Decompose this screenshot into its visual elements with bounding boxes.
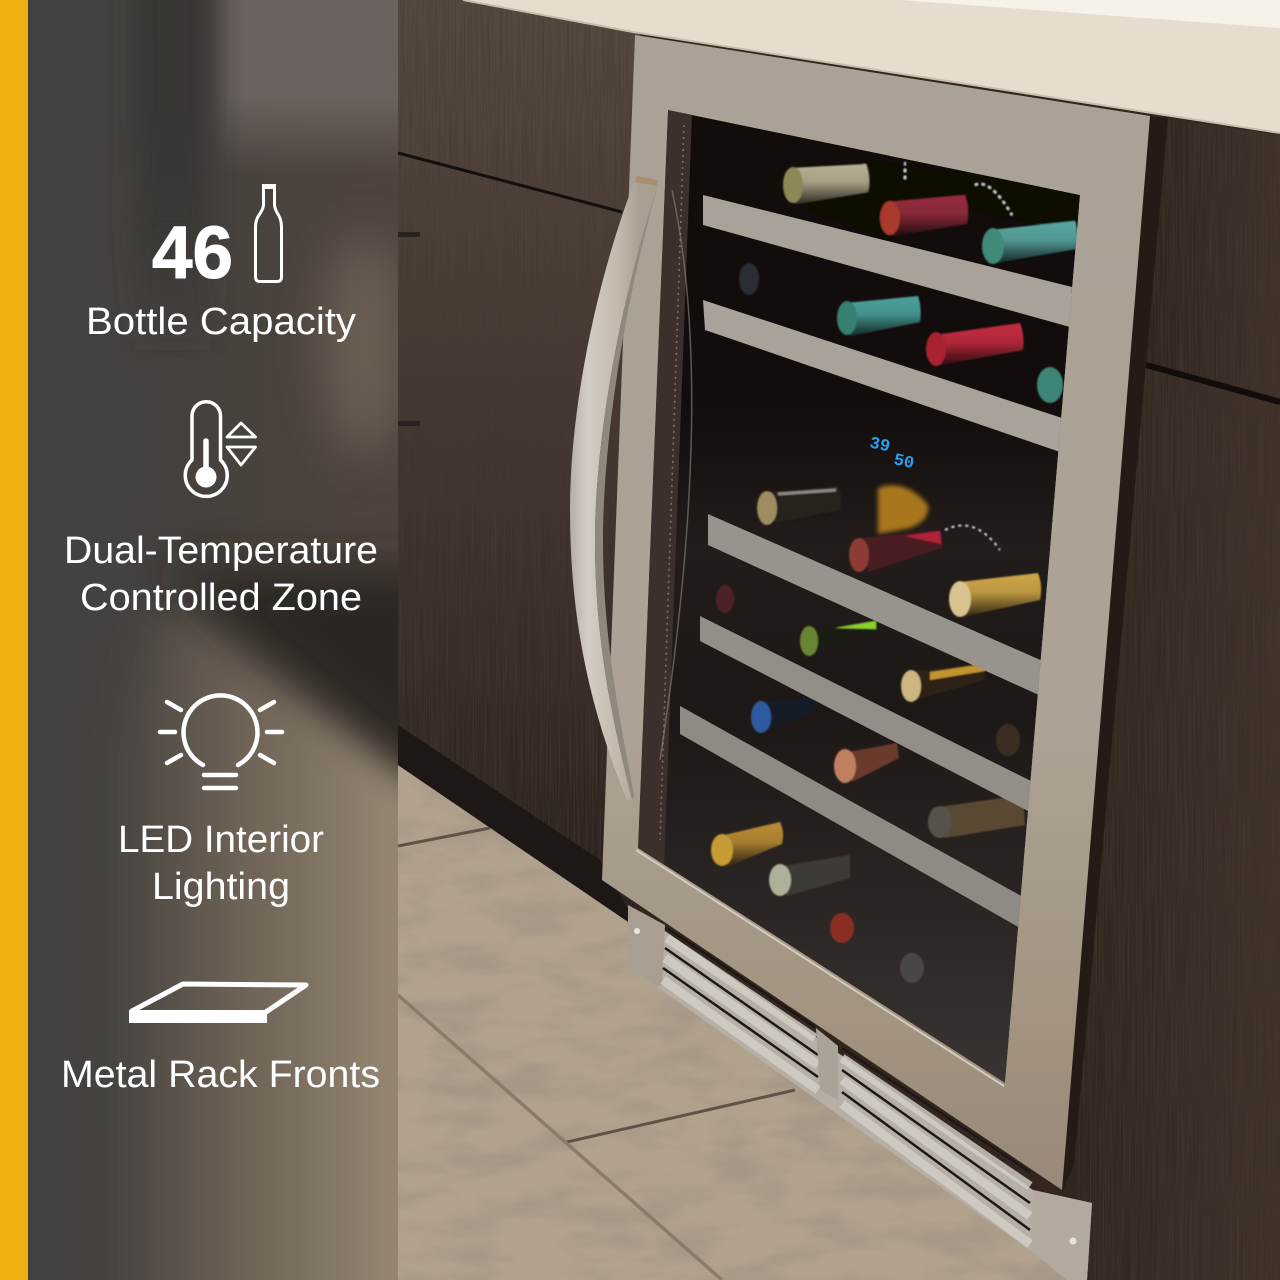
lower row bottles [765,695,815,730]
right wood cabinets [1070,110,1280,1280]
frame inner lower highlight [636,850,1004,1086]
feature: dual-temperature zone: Controlled Zone [80,577,362,619]
middle row bottles [770,486,841,523]
glass door with interior [638,110,1080,1083]
label: LED Interior [118,819,324,861]
icon: light bulb [160,695,282,788]
number 46: 46 [152,211,233,294]
feature: dual-temperature zone [64,402,378,619]
translucent blurred side panel [28,0,398,1280]
temperature display: 50 [892,451,916,474]
door dark side edge [1062,116,1168,1192]
yellow accent strip [0,0,28,1280]
icon: wine bottle [256,184,282,282]
label: Dual-Temperature [64,530,378,572]
temperature display: 39 [868,434,892,457]
photo background: wine cooler in kitchen [398,0,1280,1280]
feature: 46 bottle capacity [86,184,356,343]
left wood cabinets [398,0,640,930]
left reflection column [638,110,692,866]
wine bottles [711,160,1078,983]
toe kick shadow [398,725,640,930]
top row dark bottle bodies [800,160,1078,240]
tile floor [398,760,1078,1280]
stainless door frame [602,35,1150,1190]
stainless kick plate and vent [628,905,1092,1280]
feature: LED interior lighting [118,695,324,908]
quartz countertop [463,0,1280,133]
feature: metal rack fronts [61,984,380,1096]
feature: LED interior lighting: Lighting [152,866,290,908]
icon: thermometer with arrows [185,402,256,496]
lit label behind bottles [878,485,928,534]
metal rack fronts [680,195,1072,928]
glass reflection line [660,190,692,760]
label: Metal Rack Fronts [61,1054,380,1096]
label: Bottle Capacity [86,301,356,343]
temperature display [870,437,914,468]
icon: rack shelf [129,984,306,1023]
curved door handle [570,176,658,800]
